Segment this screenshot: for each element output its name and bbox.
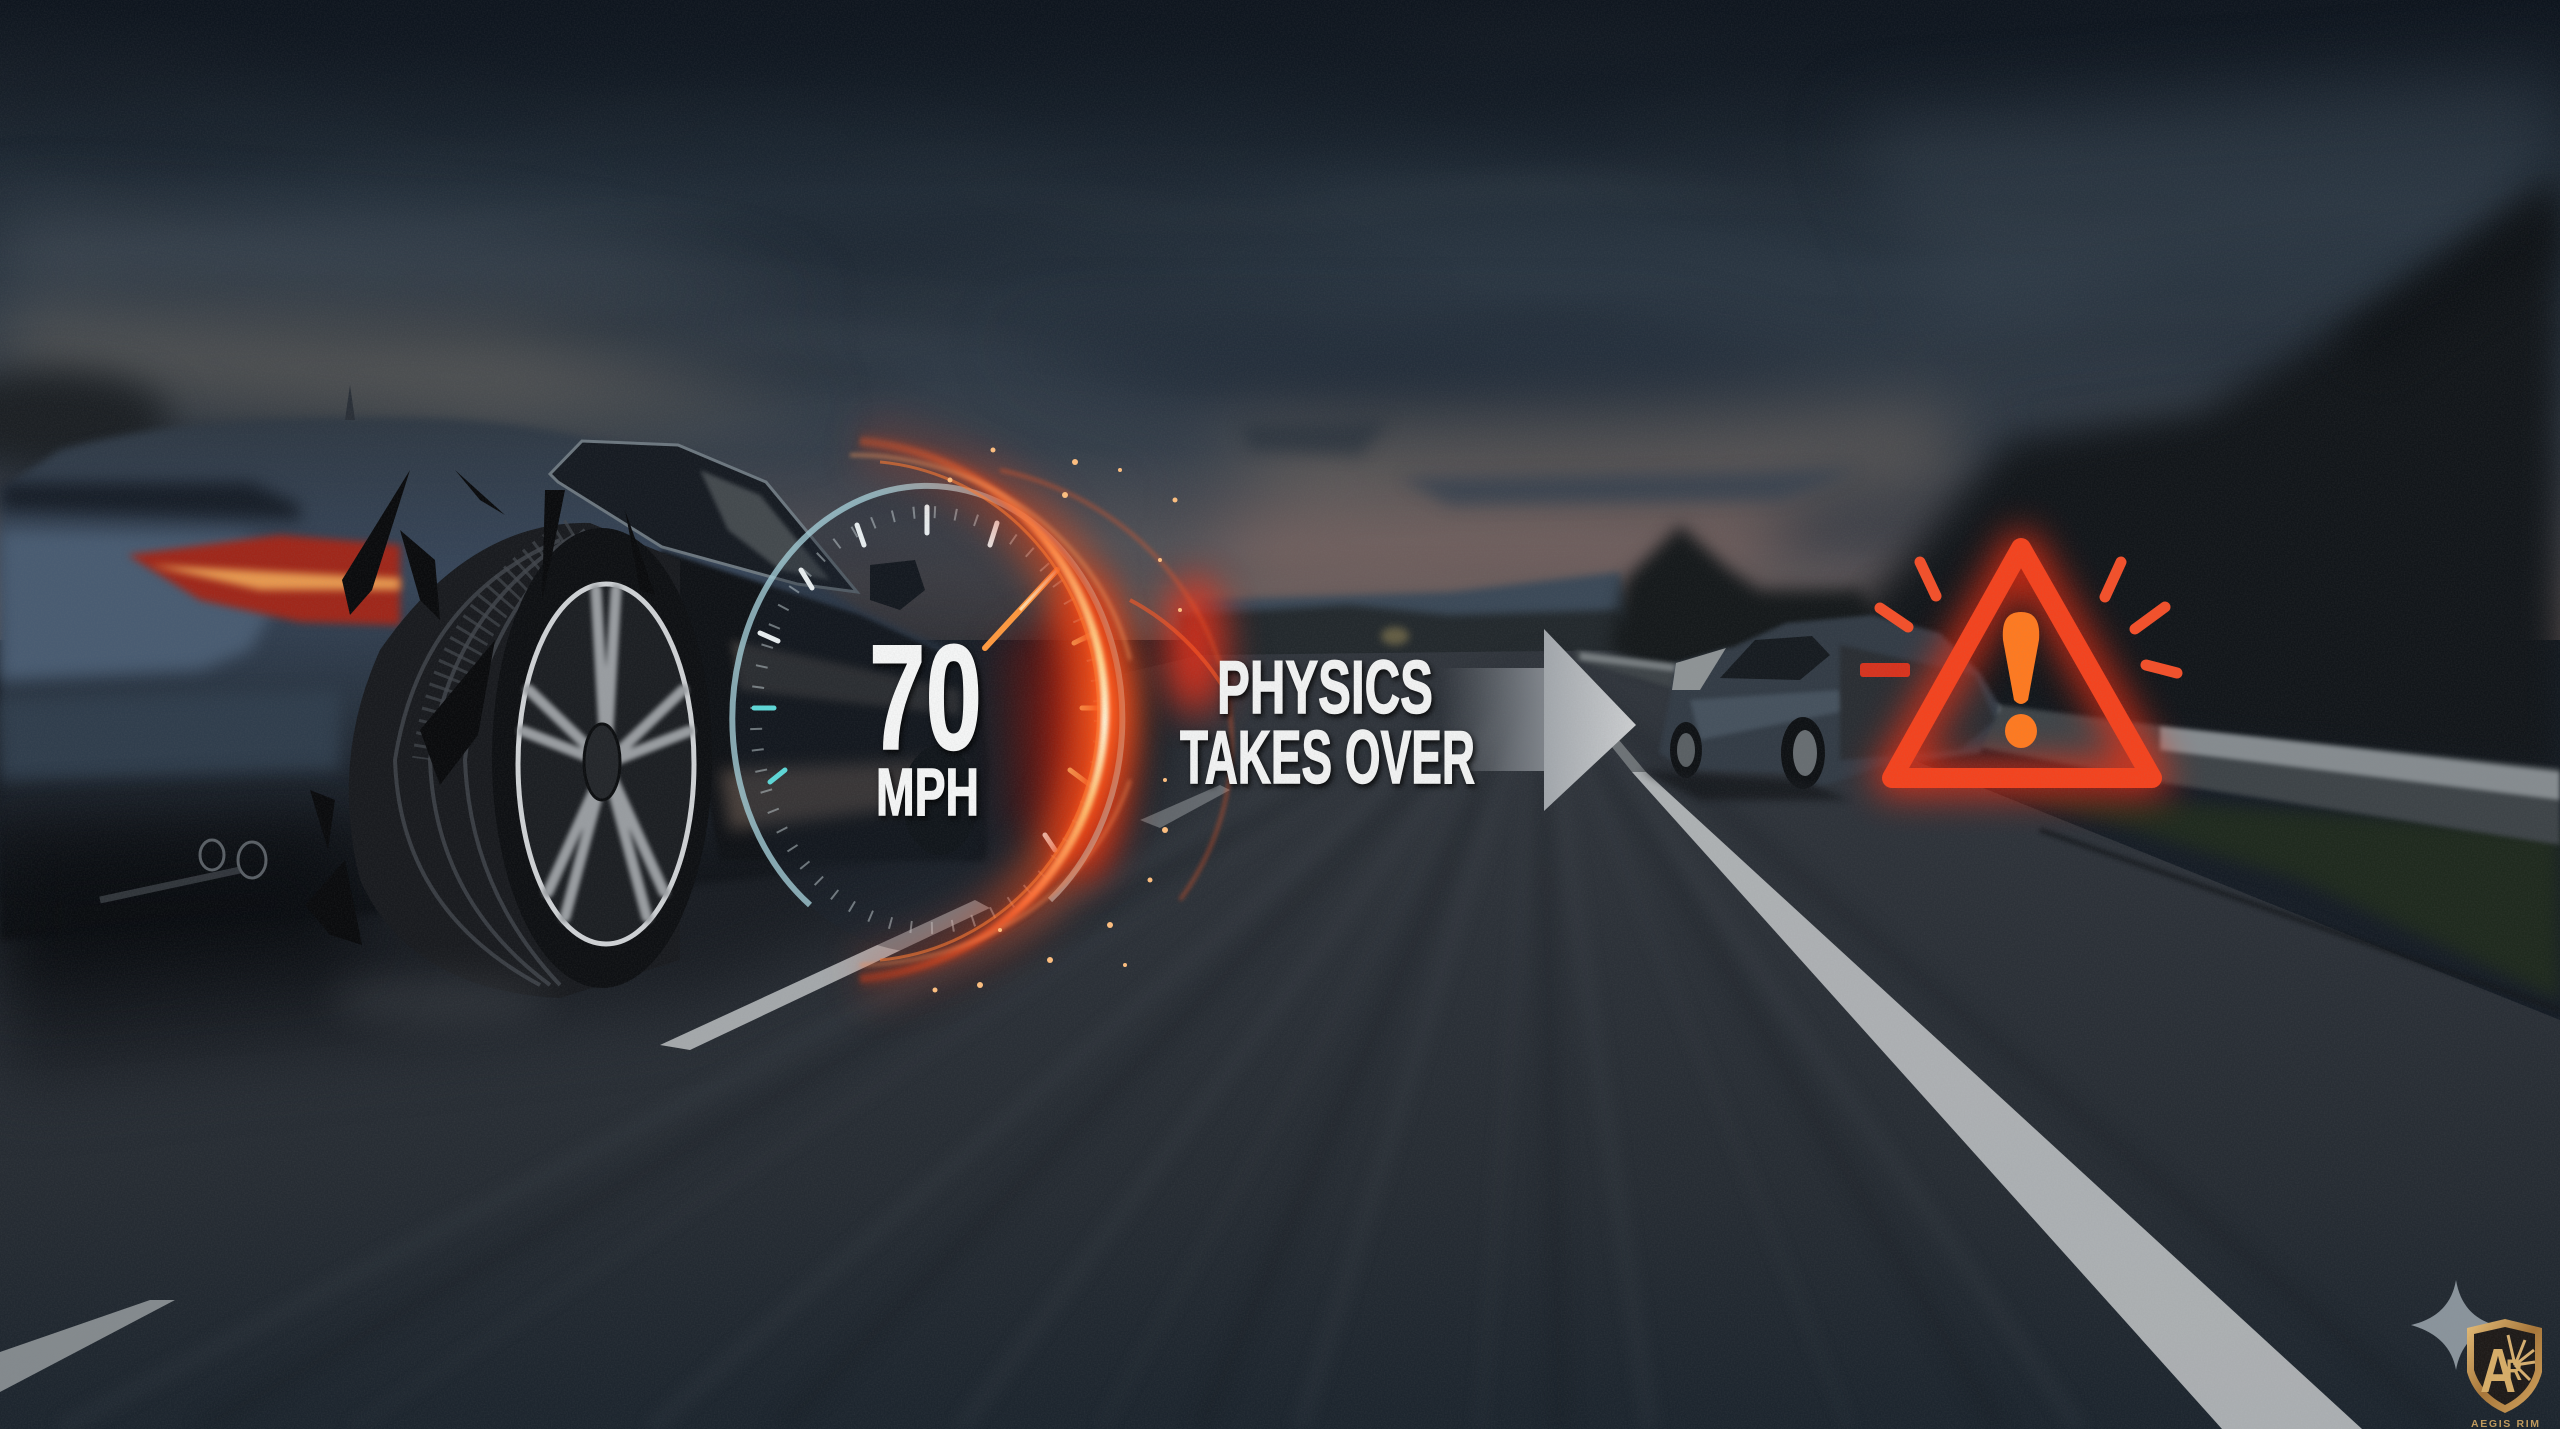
speedometer gauge xyxy=(732,486,1127,953)
warning triangle icon xyxy=(1880,548,2177,778)
door reflections xyxy=(660,550,990,860)
taillight xyxy=(128,535,400,625)
speed readout: 70 MPH: MPH xyxy=(876,755,979,830)
logo: Aegis Rim shield: A xyxy=(2480,1337,2516,1406)
tire and alloy wheel xyxy=(305,470,712,1025)
background: road surface xyxy=(0,650,2560,1429)
exhaust tips xyxy=(200,840,266,878)
alert rays xyxy=(1880,562,2177,673)
sparks xyxy=(932,448,1182,992)
dark blurred trees at far left xyxy=(0,370,170,470)
logo: sparkle star xyxy=(2411,1280,2495,1370)
caption: physics takes over: TAKES OVER xyxy=(1180,715,1475,799)
road lane lines xyxy=(0,670,2362,1429)
wing mirror xyxy=(870,560,925,610)
background: dusk sky xyxy=(0,0,2560,640)
guardrail xyxy=(1575,650,2560,845)
fire ring xyxy=(850,441,1232,992)
speeding car body xyxy=(0,385,990,990)
major ticks xyxy=(754,507,1104,850)
logo: Aegis Rim shield xyxy=(2467,1319,2542,1429)
spokes xyxy=(523,590,689,917)
side windows xyxy=(550,441,857,592)
caption: physics takes over xyxy=(1180,645,1475,799)
needle xyxy=(985,570,1057,648)
shredded tread pieces xyxy=(305,470,655,945)
right side: grass verge and dark tree mass xyxy=(1610,170,2560,1010)
crashed car xyxy=(1640,615,2000,800)
speed readout: 70 MPH: 70 xyxy=(869,613,982,781)
gauge outer ring xyxy=(732,486,1122,905)
arrow xyxy=(1440,629,1636,811)
speed readout: 70 MPH xyxy=(869,613,982,830)
minor ticks xyxy=(756,512,1100,928)
far front wheel xyxy=(902,745,978,855)
caption: physics takes over: PHYSICS xyxy=(1217,645,1433,729)
background: distant hills and tree line xyxy=(1180,572,1640,660)
fin xyxy=(345,385,355,420)
logo: Aegis Rim shield: R xyxy=(2506,1354,2522,1387)
